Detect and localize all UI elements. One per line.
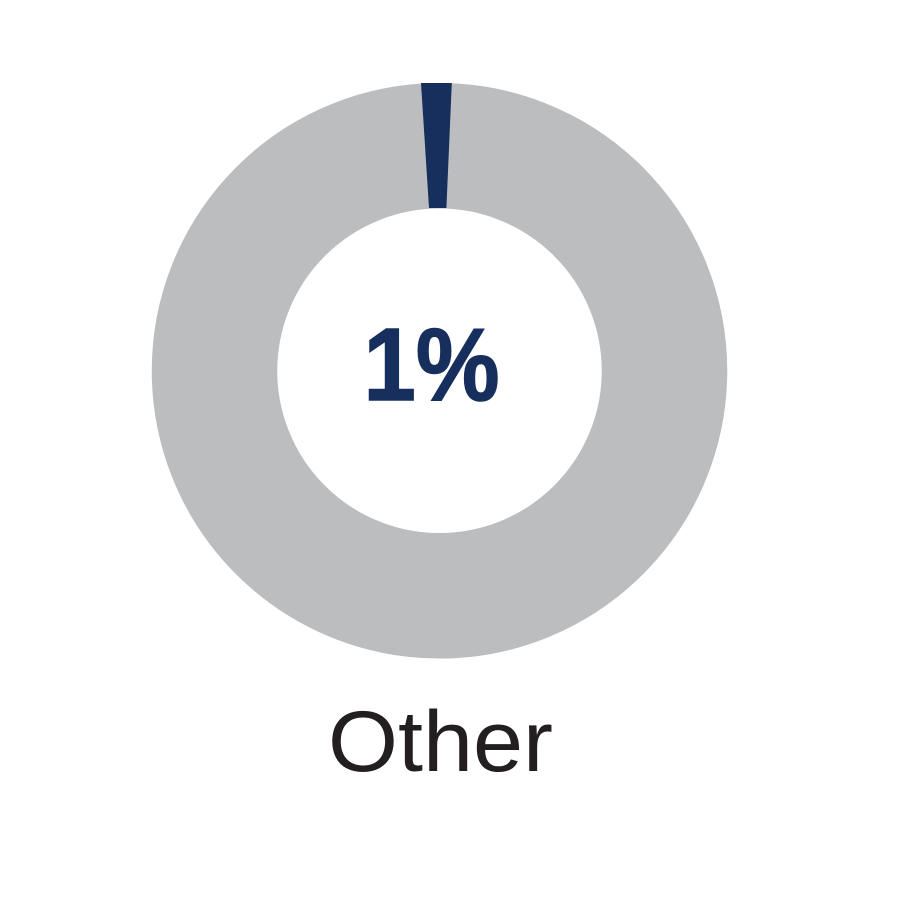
donut chart (214, 83, 664, 596)
donut segment: 1% (421, 83, 452, 208)
value label: 1%: 1% (364, 307, 500, 422)
donut segment: remaining 99% (214, 146, 664, 596)
category label: Other: Other (328, 694, 553, 790)
